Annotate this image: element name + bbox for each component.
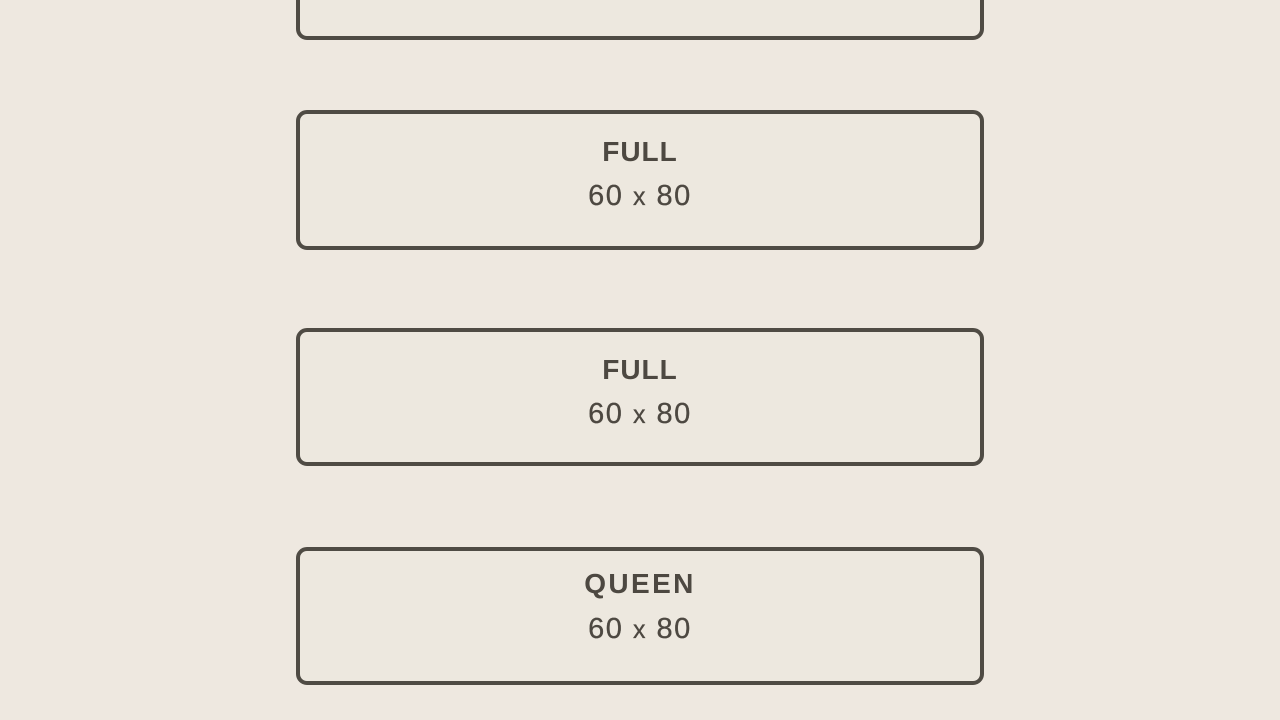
card: partial top box — [296, 0, 984, 40]
label: FULL: FULL — [602, 354, 678, 385]
dimensions: 60 x 80: 60 x 80 — [588, 398, 692, 430]
dimensions: 60 x 80: 60 x 80 — [588, 613, 692, 645]
label: QUEEN: QUEEN — [584, 568, 696, 599]
card: full size 2 — [296, 328, 984, 466]
card: full size 1 — [296, 110, 984, 250]
card: queen size — [296, 547, 984, 685]
dimensions: 60 x 80: 60 x 80 — [588, 180, 692, 212]
label: FULL: FULL — [602, 136, 678, 167]
